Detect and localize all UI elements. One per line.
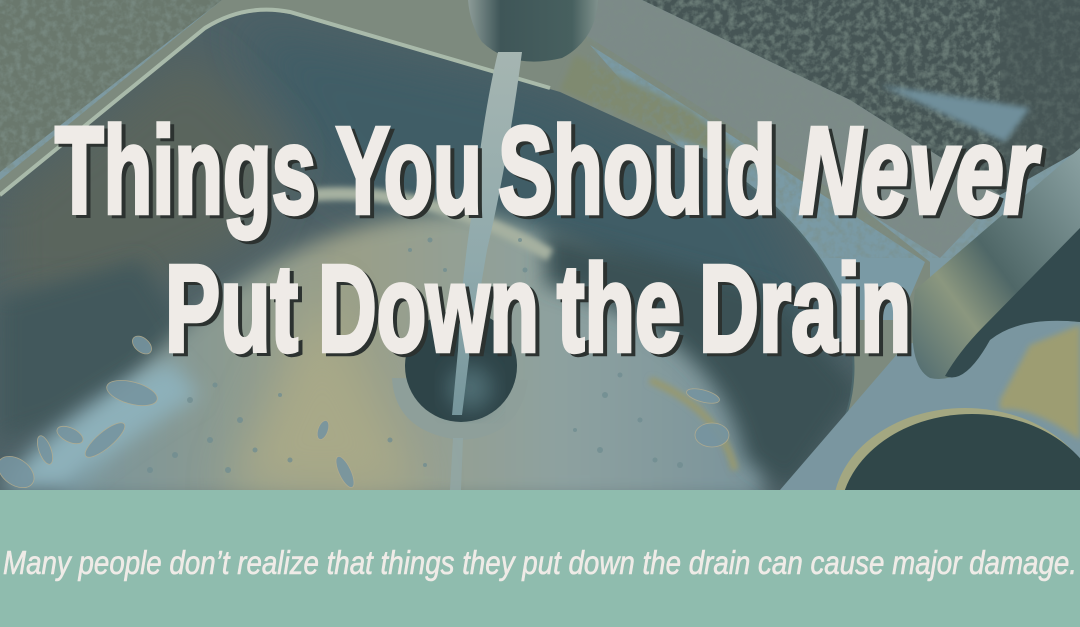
background photo: kitchen sink bbox=[0, 0, 1080, 490]
title shadow: Things bbox=[59, 106, 320, 243]
title shadow: Put bbox=[169, 244, 302, 381]
steel rim bbox=[0, 0, 930, 410]
water stream bbox=[452, 52, 522, 415]
title shadow: Down bbox=[322, 244, 543, 381]
title text: Things bbox=[55, 103, 316, 240]
right faucet bbox=[912, 148, 1080, 379]
countertop left bbox=[0, 0, 222, 172]
rim highlight bbox=[0, 10, 550, 195]
countertop right bbox=[587, 0, 1080, 258]
title text: the bbox=[557, 241, 681, 378]
water droplets bbox=[0, 336, 730, 488]
title text bbox=[55, 103, 1041, 378]
faucet spout top bbox=[468, 0, 598, 62]
sink basin bbox=[0, 12, 852, 490]
title shadow: You bbox=[340, 106, 486, 243]
title bbox=[55, 103, 1045, 381]
title shadow: Should bbox=[502, 106, 780, 243]
title text: Should bbox=[498, 103, 776, 240]
title text: Put bbox=[165, 241, 298, 378]
title shadow: Drain bbox=[703, 244, 915, 381]
title text: Down bbox=[318, 241, 539, 378]
drain bbox=[392, 312, 517, 436]
teal band bbox=[0, 490, 1080, 627]
title text: Drain bbox=[699, 241, 911, 378]
title text: You bbox=[336, 103, 482, 240]
title shadow: the bbox=[561, 244, 685, 381]
second bowl bbox=[780, 324, 1080, 490]
title shadow bbox=[59, 106, 1045, 381]
